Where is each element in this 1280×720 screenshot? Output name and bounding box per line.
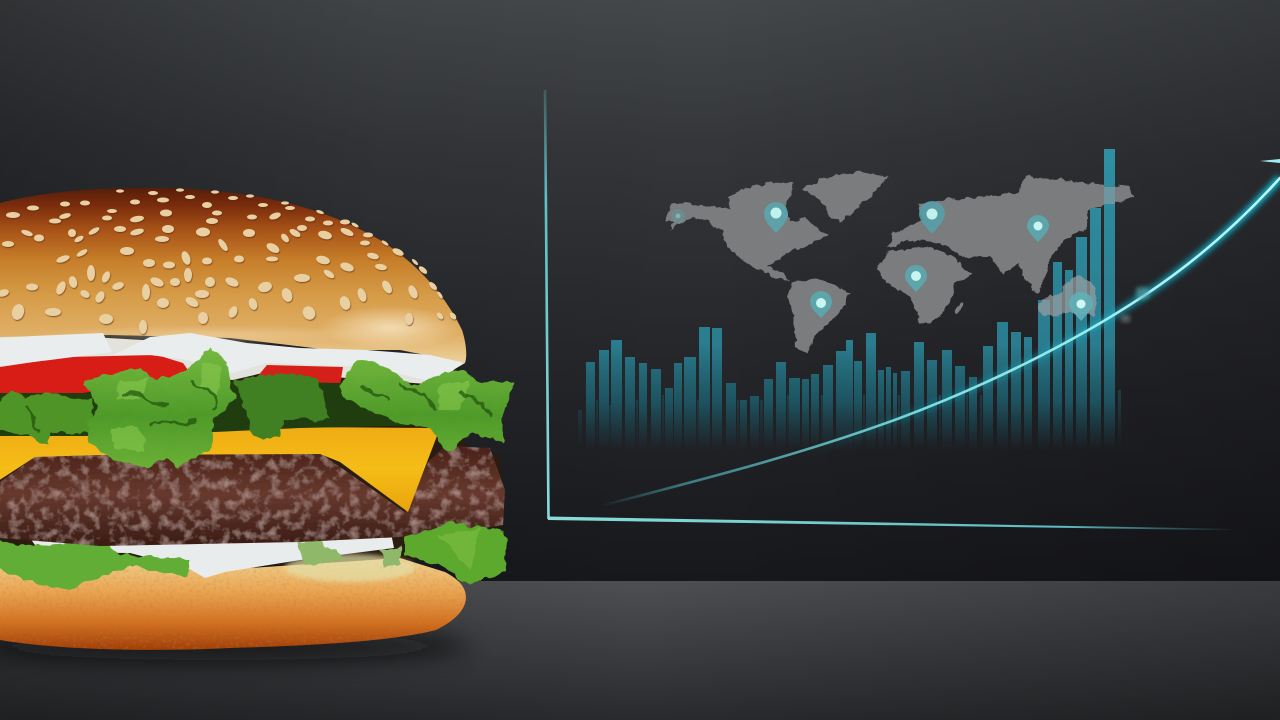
bar chart: secondary faded bars: [578, 390, 1121, 450]
Australia and arctic highlights: [1038, 187, 1115, 317]
background floor: [0, 581, 1280, 720]
lettuce: center leaf: [83, 348, 237, 468]
lettuce: right cluster: [340, 362, 515, 453]
cheese: [0, 427, 440, 512]
map pins: [671, 201, 1093, 321]
map: Africa: [877, 247, 973, 323]
map: Greenland: [801, 172, 888, 222]
pin: South America: [810, 291, 832, 318]
world map: [666, 172, 1134, 353]
trend marker: [1136, 287, 1149, 299]
bottom mayo: [30, 528, 394, 578]
lettuce dark back layer: [0, 381, 440, 436]
trend arrow head: [1260, 159, 1280, 163]
lettuce: middle leaf: [233, 375, 330, 437]
map: South America: [787, 278, 851, 353]
pin: Africa: [905, 265, 927, 292]
top mayo: [0, 333, 465, 382]
sesame seeds: [0, 188, 457, 334]
top lettuce: [0, 348, 515, 468]
map: Madagascar: [955, 301, 963, 313]
map: North America: [666, 182, 829, 282]
bottom lettuce left: [0, 540, 402, 590]
lettuce: shaded folds: [25, 380, 490, 430]
burger shadow: [0, 632, 470, 660]
top bun: [0, 188, 466, 363]
pin: Alaska: [671, 209, 685, 223]
chart axes: [545, 90, 1240, 530]
pin: Australia: [1069, 292, 1093, 321]
bar chart: [578, 149, 1121, 452]
burger: [0, 188, 515, 650]
bottom lettuce right: [405, 522, 506, 586]
patty: [0, 446, 505, 546]
burger base filler: [0, 332, 504, 565]
pin: Europe: [919, 201, 945, 234]
sauce base under top bun: [0, 332, 465, 385]
pin: Asia: [1027, 215, 1049, 242]
lettuce: left leaf: [0, 390, 93, 445]
map: Eurasia: [888, 175, 1134, 293]
trend arrow curve: [604, 159, 1280, 505]
bottom bun: [0, 554, 466, 650]
tomato: [0, 355, 343, 393]
pin: North America: [764, 202, 788, 233]
lettuce: highlights: [110, 360, 470, 450]
